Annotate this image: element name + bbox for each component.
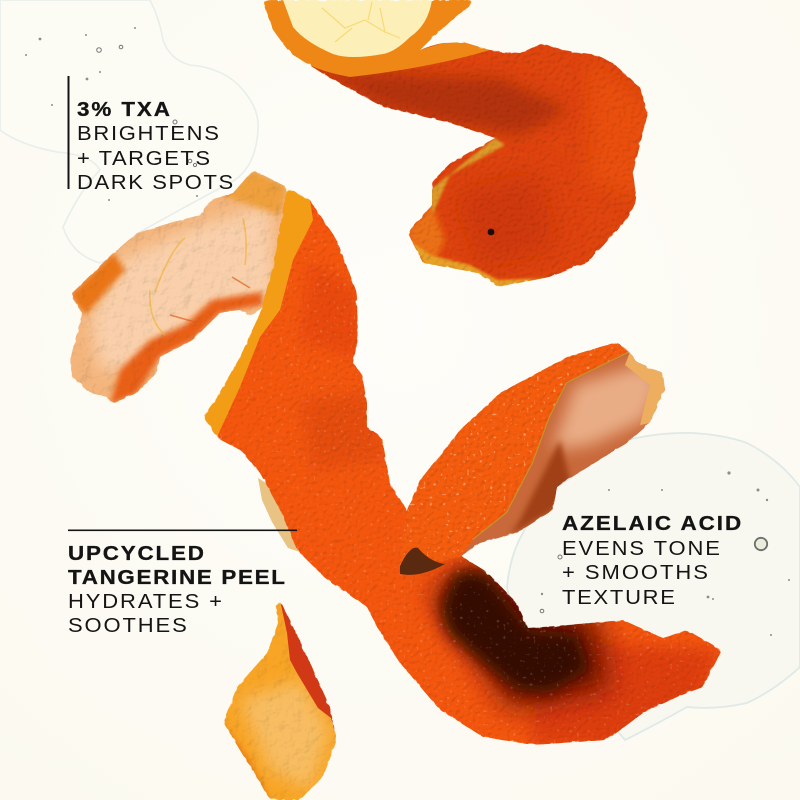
callout: azelaic acid: TEXTURE	[562, 587, 675, 609]
callout: upcycled tangerine peel: UPCYCLED	[68, 543, 204, 565]
tangerine peel: main spiral	[195, 180, 730, 755]
callout: 3% TXA: 3% TXA	[77, 99, 170, 121]
top peel orange rim	[262, 0, 490, 77]
tangerine peel: top piece	[264, 0, 648, 286]
peel: torn pith behind spiral	[258, 478, 392, 636]
callout: upcycled tangerine peel	[68, 530, 297, 637]
tangerine peel: pith flap	[70, 171, 287, 403]
callout: azelaic acid: + SMOOTHS	[562, 562, 708, 584]
callout: upcycled tangerine peel: TANGERINE PEEL	[68, 567, 285, 589]
callout: 3% TXA: DARK SPOTS	[77, 172, 233, 194]
callout: azelaic acid	[562, 513, 741, 609]
top peel pale pith	[283, 0, 432, 57]
curl hole shadow	[400, 548, 445, 575]
callout: azelaic acid: EVENS TONE	[562, 538, 720, 560]
shadow on spiral	[440, 570, 590, 693]
curled flap orange skin	[398, 342, 630, 566]
callout: upcycled tangerine peel: HYDRATES +	[68, 591, 222, 613]
callout: upcycled tangerine peel: SOOTHES	[68, 615, 187, 637]
pith veins	[322, 2, 400, 42]
callout: 3% TXA: BRIGHTENS	[77, 123, 219, 145]
tangerine peel: curled flap	[400, 342, 665, 565]
serum droplet: right	[507, 433, 800, 740]
fragment red skin	[280, 600, 337, 740]
callout: azelaic acid: AZELAIC ACID	[562, 513, 741, 535]
spiral yellow pith edge	[203, 187, 313, 437]
callout: 3% TXA: + TARGETS	[77, 148, 210, 170]
tangerine peel: small fragment	[220, 598, 340, 800]
serum droplet: top left	[0, 0, 258, 263]
callout: 3% TXA	[68, 76, 233, 194]
